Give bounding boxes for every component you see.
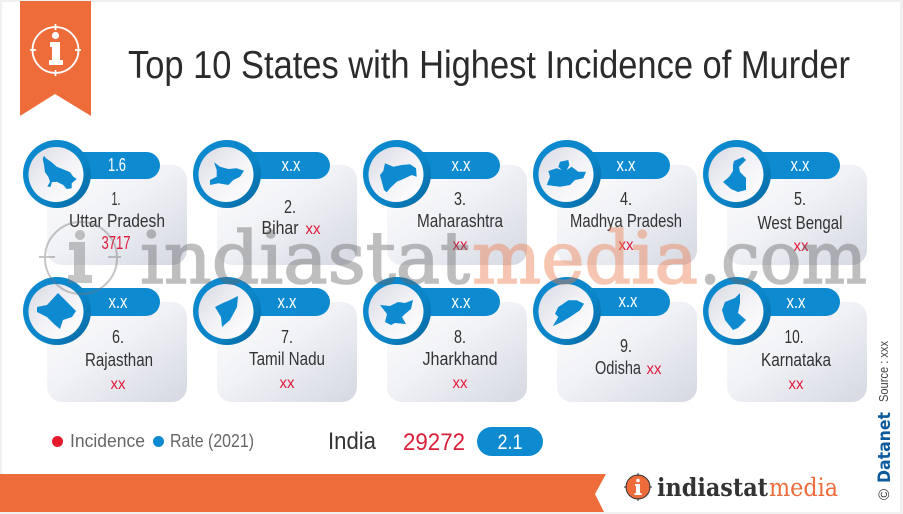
card 5: West Bengal: West Bengal <box>758 213 842 233</box>
card 3: Maharashtra <box>363 140 527 265</box>
footer logo <box>624 473 838 502</box>
card 6: Rajasthan: x.x <box>108 292 128 312</box>
watermark <box>39 216 867 300</box>
watermark: indiastat <box>140 216 470 300</box>
card 8: Jharkhand: Jharkhand <box>422 349 498 369</box>
card 3: Maharashtra: xx <box>452 237 468 254</box>
card 1: Uttar Pradesh: 1. <box>112 189 120 209</box>
footer logo: media <box>769 473 838 502</box>
card 7: Tamil Nadu <box>193 277 357 402</box>
card 2: Bihar: x.x <box>282 155 300 175</box>
watermark: media <box>472 216 698 300</box>
card 6: Rajasthan <box>23 277 187 402</box>
national total: India <box>328 428 377 455</box>
card 4: Madhya Pradesh <box>533 140 697 265</box>
watermark: .com <box>699 216 867 300</box>
card 6: Rajasthan: Rajasthan <box>85 350 153 370</box>
national total <box>328 427 543 456</box>
card 3: Maharashtra: x.x <box>452 155 470 175</box>
source credit: Datanet <box>875 412 895 483</box>
source credit <box>875 341 895 500</box>
card 7: Tamil Nadu: xx <box>280 375 294 392</box>
card 4: Madhya Pradesh: xx <box>618 237 634 254</box>
card 2: Bihar: xx <box>306 221 320 238</box>
card 10: Karnataka: Karnataka <box>761 350 832 370</box>
legend: Incidence <box>70 431 145 451</box>
card 4: Madhya Pradesh: 4. <box>620 189 632 209</box>
card 5: West Bengal: 5. <box>794 189 806 209</box>
card 10: Karnataka <box>703 277 867 402</box>
card 10: Karnataka: xx <box>788 376 804 393</box>
card 7: Tamil Nadu: Tamil Nadu <box>249 349 325 369</box>
footer logo: indiastat <box>657 473 768 502</box>
card 2: Bihar: Bihar <box>262 218 298 238</box>
card 9: Odisha <box>533 277 697 402</box>
card 8: Jharkhand: x.x <box>452 292 470 312</box>
card 7: Tamil Nadu: 7. <box>281 327 293 347</box>
national total: 29272 <box>403 429 465 456</box>
card 5: West Bengal: xx <box>794 238 808 255</box>
card 10: Karnataka: x.x <box>786 292 806 312</box>
card 5: West Bengal: x.x <box>790 155 810 175</box>
card 9: Odisha: 9. <box>620 336 632 356</box>
legend: Rate (2021) <box>170 431 254 451</box>
card 10: Karnataka: 10. <box>784 327 804 347</box>
card 3: Maharashtra: 3. <box>454 189 466 209</box>
card 6: Rajasthan: xx <box>110 376 126 393</box>
card 5: West Bengal <box>703 140 867 265</box>
card 6: Rajasthan: 6. <box>112 327 124 347</box>
ribbon with info icon <box>20 1 91 116</box>
source credit: © <box>876 489 893 500</box>
card 2: Bihar: 2. <box>284 197 296 217</box>
card 1: Uttar Pradesh: 1.6 <box>108 155 126 175</box>
card 8: Jharkhand: 8. <box>454 327 466 347</box>
footer bar <box>0 474 606 512</box>
card 3: Maharashtra: Maharashtra <box>417 211 504 231</box>
card 4: Madhya Pradesh: x.x <box>616 155 636 175</box>
card 9: Odisha: Odisha <box>595 358 642 378</box>
card 2: Bihar <box>193 140 357 265</box>
card 1: Uttar Pradesh <box>23 140 187 265</box>
card 4: Madhya Pradesh: Madhya Pradesh <box>570 211 682 231</box>
card 8: Jharkhand: xx <box>452 375 468 392</box>
source credit: Source : xxx <box>876 341 891 402</box>
card 9: Odisha: x.x <box>618 291 638 311</box>
card 1: Uttar Pradesh: Uttar Pradesh <box>69 211 165 231</box>
card 1: Uttar Pradesh: 3717 <box>102 233 130 253</box>
card 9: Odisha: xx <box>646 361 662 378</box>
card 8: Jharkhand <box>363 277 527 402</box>
national total: 2.1 <box>498 431 522 454</box>
legend <box>52 431 254 451</box>
card 7: Tamil Nadu: x.x <box>278 292 296 312</box>
